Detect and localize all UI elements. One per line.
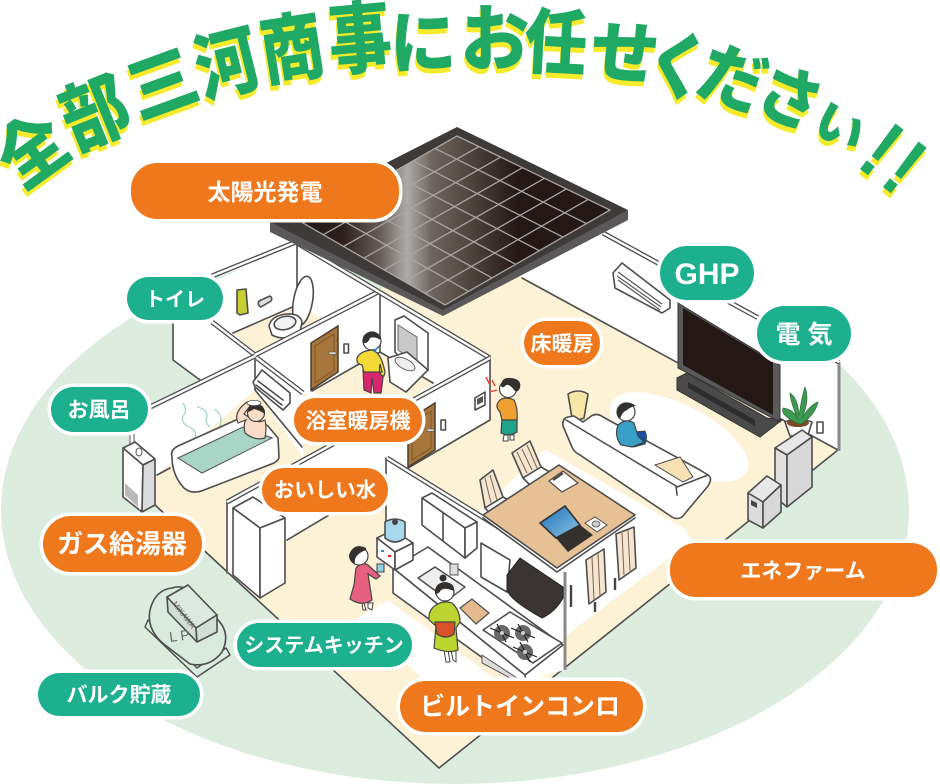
person: pink girl with cup bbox=[349, 546, 384, 610]
icon: upper cabinet bbox=[422, 493, 477, 558]
label: system kitchen bbox=[237, 623, 412, 667]
icon: mouse bbox=[585, 517, 607, 532]
icon: water heater bbox=[123, 432, 155, 512]
person: worried woman bbox=[486, 377, 520, 441]
dining chairs right bbox=[571, 527, 636, 612]
label: toilet bbox=[127, 277, 223, 320]
title: 三 bbox=[116, 35, 209, 134]
icon: door bbox=[311, 326, 338, 390]
label: solar power: 太陽光発電 bbox=[208, 179, 322, 205]
label: GHP: GHP bbox=[674, 258, 740, 291]
cushion bbox=[655, 457, 693, 482]
person: mother with pot bbox=[429, 574, 460, 662]
icon: LP bulk tank: MIKAWA bbox=[170, 600, 198, 631]
icon: potted plant bbox=[783, 387, 818, 436]
icon: telephone bbox=[549, 471, 578, 492]
front wall with door and refrigerator bbox=[227, 358, 490, 598]
label: electricity: 電 気 bbox=[776, 321, 832, 349]
label: floor heating bbox=[524, 321, 600, 365]
icon: vanity bbox=[388, 316, 428, 392]
washroom bbox=[255, 243, 490, 440]
solar panel bbox=[270, 127, 628, 316]
icon: door bbox=[408, 403, 435, 467]
icon: toilet paper bbox=[258, 296, 272, 307]
title: お bbox=[461, 0, 529, 80]
icon: living air conditioner bbox=[613, 263, 670, 313]
icon: towel bbox=[237, 289, 248, 315]
label: electricity bbox=[757, 306, 851, 361]
label: bulk storage: バルク貯蔵 bbox=[66, 684, 172, 707]
label: bulk storage bbox=[38, 673, 200, 716]
white dining mat bbox=[470, 453, 688, 632]
living room back wall bbox=[520, 188, 839, 451]
person: brushing teeth bbox=[357, 332, 385, 393]
icon: wall controller bbox=[475, 392, 485, 410]
label: floor heating: 床暖房 bbox=[530, 333, 594, 356]
dining table bbox=[483, 465, 635, 572]
bath air conditioner bbox=[253, 370, 290, 410]
beige house floor bbox=[155, 228, 838, 768]
label: built-in stove: ビルトインコンロ bbox=[420, 693, 620, 721]
label: toilet: トイレ bbox=[145, 289, 205, 311]
title: 部 bbox=[49, 62, 142, 165]
sofa bbox=[563, 414, 710, 518]
icon: waste basket bbox=[568, 391, 588, 420]
title: せ bbox=[586, 12, 663, 96]
label: gas water heater: ガス給湯器 bbox=[57, 529, 187, 559]
kitchen counter bbox=[393, 547, 563, 690]
icon: refrigerator bbox=[233, 497, 285, 598]
title: い bbox=[804, 93, 875, 164]
label: bathroom heater bbox=[294, 398, 422, 442]
icon: Ene-Farm units bbox=[748, 430, 812, 528]
title: さ bbox=[746, 53, 832, 145]
label: Ene-Farm: エネファーム bbox=[740, 560, 866, 583]
icon: water server bbox=[377, 519, 413, 570]
window bbox=[481, 543, 510, 592]
icon: sink bbox=[418, 564, 465, 600]
title: 商 bbox=[255, 3, 330, 96]
green ground ellipse bbox=[1, 236, 909, 784]
white backdrop above the house walls bbox=[212, 150, 860, 366]
label: built-in stove bbox=[400, 681, 643, 732]
icon: oven grill bbox=[482, 655, 520, 681]
label: Ene-Farm bbox=[670, 543, 937, 597]
icon: TV bbox=[677, 303, 782, 437]
label: bath bbox=[51, 387, 148, 432]
bathtub with person bbox=[172, 400, 279, 492]
white kitchen mat bbox=[357, 600, 510, 700]
person: boy on sofa bbox=[617, 402, 646, 447]
title: 任 bbox=[522, 3, 589, 86]
label: bathroom heater: 浴室暖房機 bbox=[306, 410, 410, 433]
title: ! bbox=[843, 105, 920, 194]
icon: LP bulk tank: L P bbox=[168, 626, 191, 645]
toilet room bbox=[173, 242, 378, 383]
icon: stove top bbox=[483, 612, 562, 663]
label: tasty water bbox=[262, 468, 388, 512]
icon: toilet bbox=[269, 275, 317, 338]
label: system kitchen: システムキッチン bbox=[244, 635, 404, 657]
label: GHP bbox=[660, 246, 754, 300]
dining chairs bbox=[480, 441, 555, 520]
icon: laptop bbox=[540, 506, 593, 552]
icon: range hood bbox=[507, 558, 563, 618]
icon: steam bbox=[182, 403, 221, 444]
label: tasty water: おいしい水 bbox=[274, 479, 377, 502]
title: だ bbox=[688, 33, 776, 127]
title: く bbox=[638, 20, 716, 115]
title bbox=[0, 0, 940, 212]
label: gas water heater bbox=[43, 516, 202, 572]
title: に bbox=[389, 5, 457, 84]
white living rug bbox=[597, 374, 761, 500]
label: bath: お風呂 bbox=[68, 399, 130, 422]
icon: cutting board bbox=[460, 599, 489, 624]
label: solar power bbox=[131, 163, 399, 219]
kitchen partition wall bbox=[386, 458, 565, 680]
title: 河 bbox=[187, 16, 268, 113]
icon: LP bulk tank bbox=[145, 585, 230, 677]
bathroom wall bbox=[133, 356, 303, 490]
